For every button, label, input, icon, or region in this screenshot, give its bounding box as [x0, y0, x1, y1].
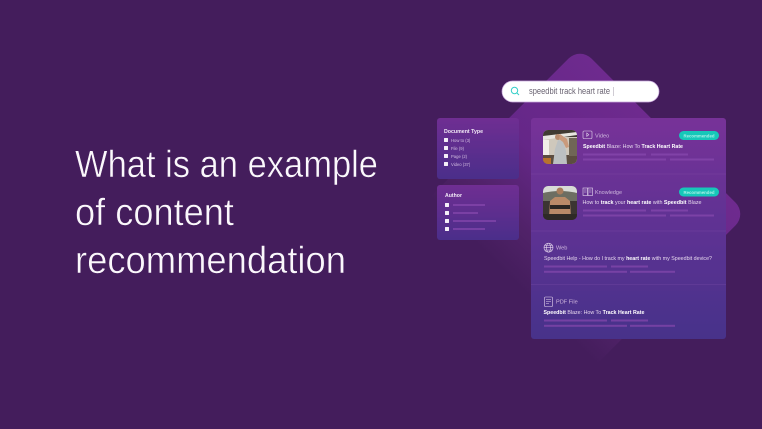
search query: speedbit track heart rate: [529, 86, 610, 96]
label: knowledge: Knowledge: [595, 190, 622, 196]
result: knowledge: [543, 186, 719, 220]
author heading: Author: [445, 193, 463, 199]
icon: knowledge: [583, 188, 592, 196]
badge: recommended: [679, 188, 719, 196]
author option 3: [445, 219, 496, 223]
heading: [75, 144, 378, 282]
heading: What is an example: [75, 144, 378, 186]
result title: Speedbit Blaze: How To Track Heart Rate: [583, 144, 683, 150]
placeholder lines: [544, 266, 675, 273]
placeholder lines: [544, 320, 675, 327]
document type heading: Document Type: [444, 129, 483, 135]
badge: recommended: Recommended: [684, 190, 715, 195]
result: web: [544, 243, 712, 273]
panel: search results: [531, 118, 726, 339]
option: video: Video (37): [451, 162, 471, 167]
icon: document: [544, 297, 552, 306]
placeholder lines: [583, 210, 714, 216]
heading: recommendation: [75, 240, 346, 282]
heading: of content: [75, 192, 234, 234]
result title: How to track your heart rate with Speedbit Blaze: [582, 200, 702, 206]
option: file: File (9): [451, 146, 465, 151]
result title: Speedbit Blaze: How To Track Heart Rate: [544, 310, 644, 316]
option: how to: How to (3): [451, 138, 471, 143]
badge: recommended: [679, 131, 719, 140]
icon: search: [511, 87, 519, 95]
icon: globe: [544, 243, 553, 252]
label: web: Web: [556, 246, 567, 252]
option: page: Page (2): [451, 154, 468, 159]
author option 1: [445, 203, 485, 207]
author option 2: [445, 211, 478, 215]
result title: Speedbit Help - How do I track my heart rate with my Speedbit device?: [544, 256, 712, 262]
cursor: [612, 87, 615, 96]
thumbnail: athlete photo: [543, 186, 577, 220]
result: video: [543, 130, 719, 164]
result: pdf file: [544, 297, 675, 327]
badge: recommended: Recommended: [684, 133, 715, 138]
author option 4: [445, 227, 485, 231]
panel: document type: [437, 118, 519, 179]
panel: author: [437, 185, 519, 240]
label: video: Video: [595, 134, 609, 140]
search bar: [502, 81, 659, 102]
label: pdf file: PDF File: [556, 300, 578, 306]
icon: video: [583, 131, 592, 138]
decorative diamond: [413, 47, 747, 381]
infographic canvas: [75, 54, 740, 344]
thumbnail: gym runner photo: [543, 130, 577, 164]
placeholder lines: [583, 154, 714, 160]
